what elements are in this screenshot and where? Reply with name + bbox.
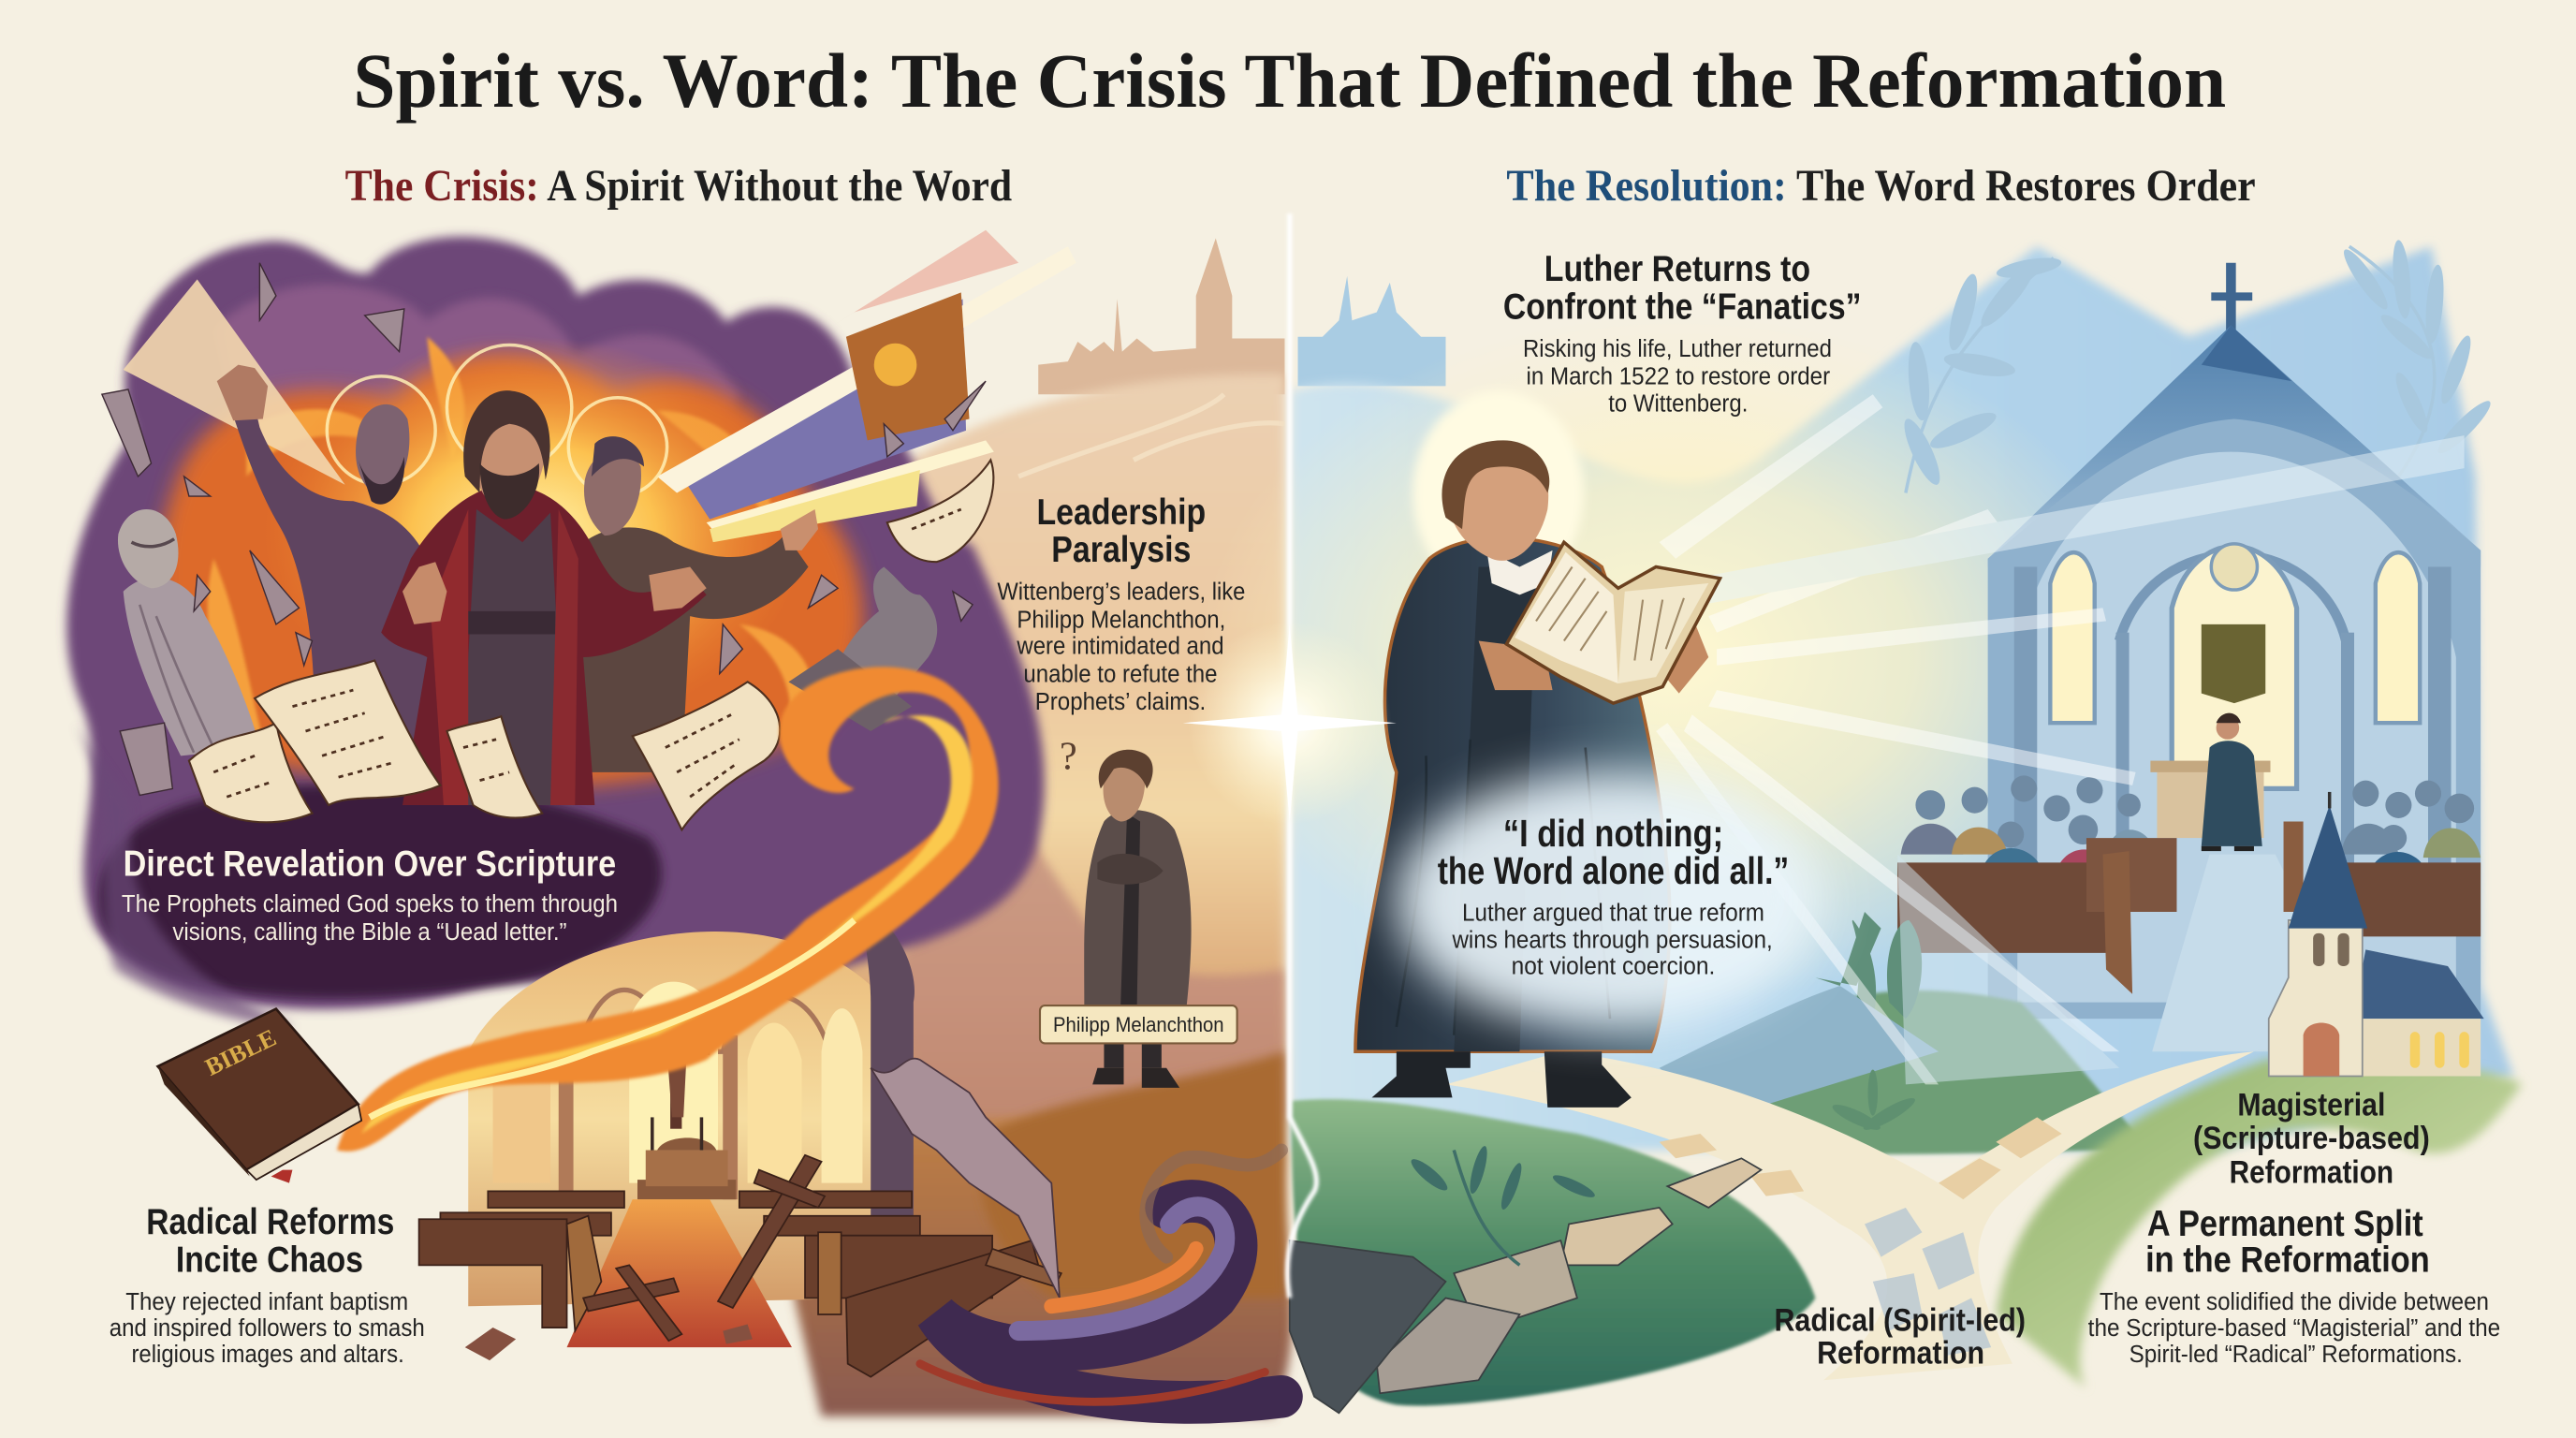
text block: Direct Revelation: visions, calling the Bible a “Uead letter.” bbox=[172, 917, 567, 946]
text block: Luther quote: not violent coercion. bbox=[1512, 952, 1715, 980]
text block: Luther quote: the Word alone did all.” bbox=[1438, 849, 1789, 892]
text block: Luther Returns bbox=[1503, 249, 1862, 418]
orange fire core bbox=[158, 356, 863, 788]
Philipp Melanchthon figure: ? bbox=[1060, 734, 1077, 778]
text block: Leadership Paralysis: Leadership bbox=[1036, 492, 1206, 533]
mid green hills bbox=[1660, 912, 2152, 1154]
distant mountains bbox=[896, 772, 1284, 1117]
open Bible bbox=[1506, 542, 1720, 703]
dark cloud behind revelation text bbox=[99, 783, 662, 998]
beams of light bbox=[124, 230, 1076, 542]
title: Spirit vs. Word: The Crisis That Defined the Reformation bbox=[353, 38, 2226, 124]
heading: the resolution: The Resolution: The Word Restores Order bbox=[1506, 162, 2256, 211]
text block: Direct Revelation bbox=[122, 844, 618, 946]
falling scrolls bbox=[189, 460, 993, 829]
church pews bbox=[419, 1191, 1061, 1377]
text block: Permanent Split bbox=[2088, 1204, 2500, 1368]
path label: Magisterial: Magisterial bbox=[2237, 1088, 2385, 1123]
text block: Luther Returns: Risking his life, Luther returned bbox=[1523, 334, 1832, 362]
left lawn bbox=[1292, 1099, 1815, 1406]
text block: Leadership Paralysis: Wittenberg’s leaders, like bbox=[997, 578, 1245, 606]
left prophet bbox=[217, 365, 435, 772]
text block: Permanent Split: A Permanent Split bbox=[2147, 1204, 2423, 1244]
text block: Leadership Paralysis: were intimidated and bbox=[1017, 632, 1224, 660]
broken wall bbox=[871, 1059, 1060, 1298]
right lawn bbox=[1996, 1058, 2522, 1388]
flame stream from the Bible bbox=[98, 667, 999, 1152]
Martin Luther figure bbox=[1355, 440, 1708, 1108]
text block: Direct Revelation: Direct Revelation Over Scripture bbox=[124, 844, 616, 884]
text block: Radical Reforms: Incite Chaos bbox=[176, 1240, 363, 1280]
yellow glow behind prophets bbox=[263, 337, 805, 731]
burning church interior bbox=[468, 895, 915, 1306]
heading: the crisis: The Crisis: A Spirit Without the Word bbox=[345, 162, 1012, 211]
leafy sapling bbox=[1408, 1145, 1597, 1265]
crucifix on altar wall bbox=[644, 1027, 710, 1129]
center prophet bbox=[381, 390, 707, 805]
icon: burning Bible book bbox=[158, 1009, 361, 1183]
glow from the book bbox=[1199, 312, 2152, 1003]
broken pillar bbox=[788, 566, 937, 731]
Luther halo bbox=[1412, 391, 1584, 594]
rubble bbox=[465, 1325, 753, 1360]
light rays from the book bbox=[1656, 394, 2465, 1084]
path label: Radical: Reformation bbox=[1817, 1336, 1984, 1372]
fallen crosses bbox=[583, 1155, 825, 1341]
path label: Radical: Radical (Spirit-led) bbox=[1774, 1303, 2026, 1339]
toppled statue bbox=[118, 509, 259, 756]
text block: Luther Returns: Luther Returns to bbox=[1544, 249, 1810, 289]
tan landscape backdrop bbox=[723, 374, 1293, 1416]
cloud flame licks bbox=[208, 337, 812, 740]
text block: Luther Returns: in March 1522 to restore order bbox=[1526, 362, 1830, 390]
road lines on hill bbox=[1018, 394, 1284, 477]
scroll writing bbox=[213, 509, 961, 797]
lower left purple strokes bbox=[74, 723, 296, 1027]
lower church fade bbox=[1897, 855, 2119, 1084]
text block: Permanent Split: The event solidified the divide between bbox=[2100, 1287, 2489, 1315]
aisle bbox=[2152, 855, 2374, 1051]
halos bbox=[327, 345, 667, 496]
congregation bbox=[1901, 775, 2481, 884]
central divider and starburst bbox=[1183, 213, 1397, 1298]
red carpet bbox=[567, 1199, 792, 1347]
text block: Leadership Paralysis: Paralysis bbox=[1051, 530, 1191, 570]
name tag: Philipp Melanchthon bbox=[1040, 1005, 1237, 1043]
olive branch left bbox=[1898, 254, 2063, 493]
altar bbox=[637, 1117, 736, 1199]
small village church bbox=[2269, 792, 2484, 1077]
path label: Magisterial: Reformation bbox=[2230, 1155, 2393, 1191]
ground under Melanchthon bbox=[980, 1051, 1284, 1298]
book on church wall bbox=[2202, 624, 2265, 703]
panel: resolution scene bbox=[1199, 240, 2522, 1413]
text block: Radical Reforms: and inspired followers to smash bbox=[110, 1313, 425, 1342]
text block: Luther quote: Luther argued that true reform bbox=[1462, 899, 1764, 927]
distant town on hill bbox=[1038, 238, 1284, 394]
sky wash bbox=[1292, 246, 2513, 1151]
path label: Radical bbox=[1774, 1303, 2026, 1372]
text block: Luther quote: “I did nothing; bbox=[1503, 812, 1723, 855]
path label: Magisterial bbox=[2193, 1088, 2430, 1191]
icon: burning Bible book: BIBLE bbox=[201, 1024, 281, 1081]
blue town on hill bbox=[1298, 276, 1445, 386]
glow behind quote bbox=[1397, 772, 1823, 1029]
forked stone path bbox=[1445, 1051, 2254, 1380]
text block: Direct Revelation: The Prophets claimed God speks to them through bbox=[122, 889, 618, 917]
large church bbox=[1988, 263, 2481, 1019]
pews bbox=[1897, 822, 2481, 994]
panel: crisis scene bbox=[66, 230, 1293, 1416]
text block: Permanent Split: in the Reformation bbox=[2145, 1240, 2430, 1280]
text block: Leadership Paralysis: unable to refute the bbox=[1023, 659, 1218, 687]
storm cloud bbox=[66, 237, 1045, 1009]
text block: Permanent Split: Spirit-led “Radical” Reformations. bbox=[2130, 1340, 2463, 1368]
text block: Leadership Paralysis: Philipp Melanchthon, bbox=[1017, 605, 1225, 633]
text block: Leadership Paralysis bbox=[997, 492, 1245, 715]
debris shards bbox=[102, 263, 986, 795]
path label: Magisterial: (Scripture-based) bbox=[2193, 1121, 2430, 1156]
right prophet bbox=[567, 436, 818, 772]
cloud upper highlights bbox=[213, 285, 739, 477]
text block: Luther quote: wins hearts through persuasion, bbox=[1452, 926, 1773, 954]
cross on church roof bbox=[2211, 263, 2252, 337]
text block: Radical Reforms: Radical Reforms bbox=[146, 1202, 394, 1242]
text block: Luther quote bbox=[1438, 812, 1789, 980]
text block: Luther Returns: Confront the “Fanatics” bbox=[1503, 286, 1862, 327]
text block: Radical Reforms bbox=[110, 1202, 425, 1368]
text block: Leadership Paralysis: Prophets’ claims. bbox=[1035, 687, 1206, 715]
name tag: Philipp Melanchthon: Philipp Melanchthon bbox=[1053, 1013, 1224, 1036]
Philipp Melanchthon figure bbox=[1060, 734, 1192, 1088]
text block: Radical Reforms: They rejected infant baptism bbox=[125, 1287, 408, 1315]
altar and pastor bbox=[2150, 713, 2271, 851]
olive branch right bbox=[2338, 240, 2496, 477]
text block: Radical Reforms: religious images and altars. bbox=[131, 1340, 404, 1368]
broken rocks bbox=[1290, 1158, 1761, 1413]
green sprig bbox=[1830, 1070, 1918, 1135]
text block: Luther Returns: to Wittenberg. bbox=[1608, 389, 1748, 418]
text block: Permanent Split: the Scripture-based “Magisterial” and the bbox=[2088, 1313, 2500, 1342]
swirling storm bottom right bbox=[920, 1151, 1281, 1402]
